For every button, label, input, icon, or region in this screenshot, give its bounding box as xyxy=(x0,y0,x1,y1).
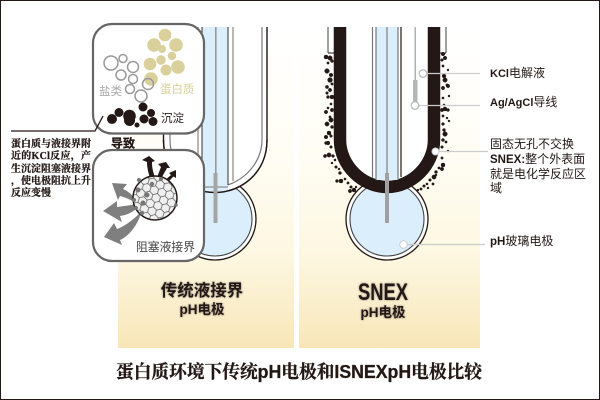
panel: magnified precipitate box xyxy=(93,24,204,134)
label: Ag/AgCl wire: Ag/AgCl导线 xyxy=(490,95,557,109)
text block: explanation: 近的KCl反应，产 xyxy=(11,149,91,162)
salt particles xyxy=(104,54,154,102)
label: salts: 盐类 xyxy=(99,84,122,98)
label: protein: 蛋白质 xyxy=(160,82,194,96)
callout: Ag/AgCl wire leader xyxy=(411,102,480,109)
callout: SNEX surface leader xyxy=(432,148,488,155)
heading: SNEX: pH电极 xyxy=(360,305,406,320)
heading: SNEX: pH电极 xyxy=(360,305,406,320)
callout: KCl electrolyte leader xyxy=(419,70,480,77)
heading: SNEX: SNEX xyxy=(358,279,408,306)
text block: explanation: 蛋白质与液接界附 xyxy=(11,137,91,150)
callout line xyxy=(11,116,103,131)
panel: traditional background xyxy=(118,27,294,348)
text block: SNEX description: 就是电化学反应区 xyxy=(490,166,586,181)
label: KCl electrolyte: KCl电解液 xyxy=(490,65,545,80)
label: pH glass electrode: pH玻璃电极 xyxy=(490,234,553,248)
heading: SNEX: SNEX xyxy=(358,279,408,306)
protein particles xyxy=(144,29,185,86)
precipitate particles xyxy=(107,102,158,128)
heading: traditional junction: pH电极 xyxy=(180,302,225,317)
callout: pH glass leader xyxy=(400,241,485,248)
heading: traditional junction: pH电极 xyxy=(180,302,225,317)
text block: SNEX description: 固态无孔不交换 xyxy=(490,136,574,151)
heading: SNEX xyxy=(358,279,408,320)
text block: explanation: 反应变慢 xyxy=(11,186,51,199)
SNEX electrode xyxy=(328,27,446,260)
label: leads to: 导致 xyxy=(111,136,135,150)
panel: blocked junction box xyxy=(93,150,204,261)
black arrows: escaping flow xyxy=(142,156,176,183)
text block: SNEX description: SNEX:整个外表面 xyxy=(490,152,585,166)
text block: explanation: 生沉淀阻塞液接界 xyxy=(11,162,91,175)
SNEX surface particles xyxy=(323,52,450,193)
panel: SNEX background xyxy=(299,27,480,348)
text block: SNEX description: 域 xyxy=(490,181,502,195)
title: 蛋白质环境下传统pH电极和ISNEXpH电极比较 xyxy=(116,361,484,382)
blocked sphere xyxy=(132,175,178,221)
label: precipitate: 沉淀 xyxy=(161,111,184,125)
heading: traditional junction: 传统液接界 xyxy=(161,280,244,300)
heading: traditional junction xyxy=(161,280,244,317)
heading: traditional junction: 传统液接界 xyxy=(161,280,244,300)
label: blocked junction: 阻塞液接界 xyxy=(136,240,195,254)
gray arrows: blocked flow xyxy=(103,183,141,245)
traditional electrode xyxy=(164,27,267,260)
text block: explanation: ，使电极阻抗上升 xyxy=(11,174,91,187)
